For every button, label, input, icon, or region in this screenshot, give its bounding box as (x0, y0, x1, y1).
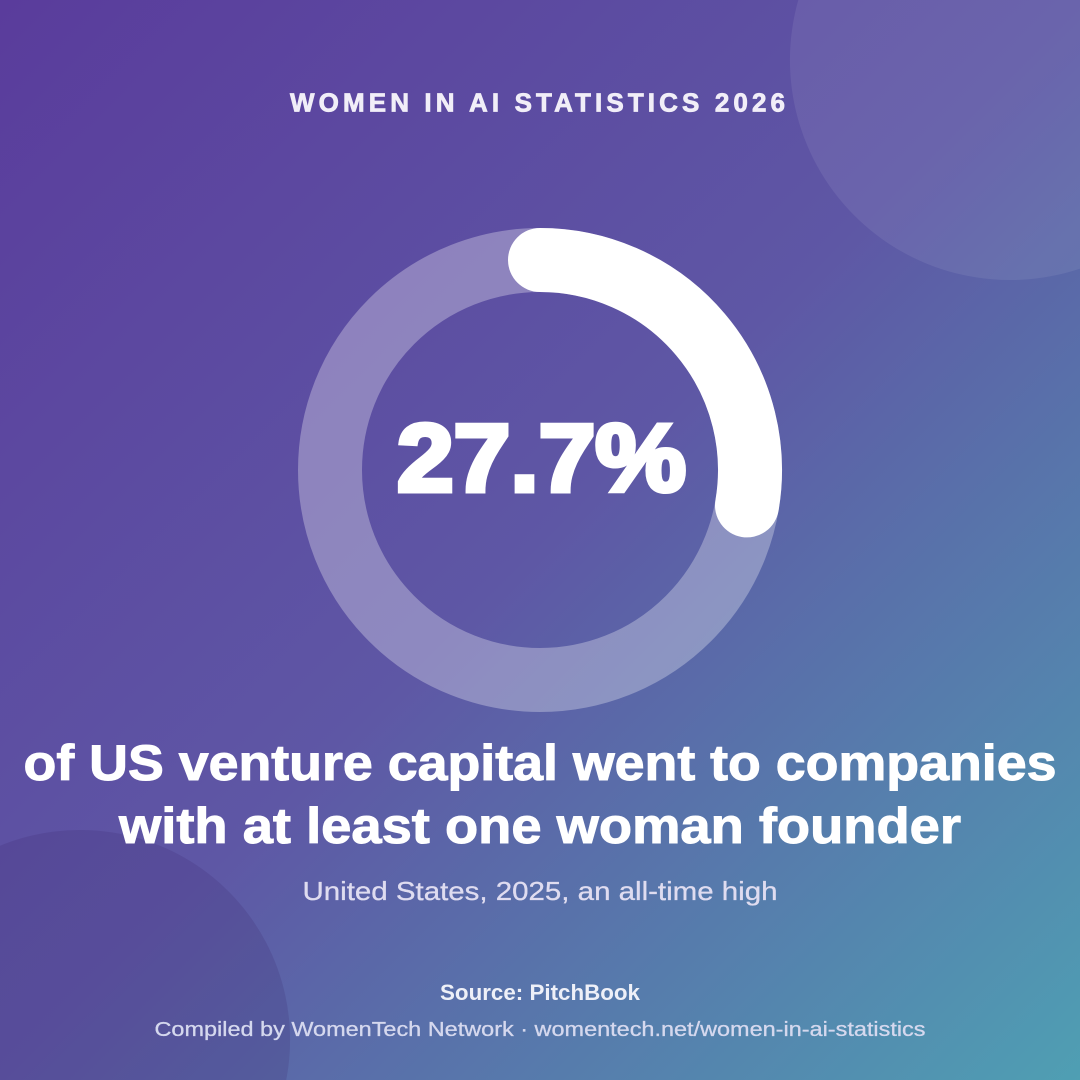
headline: with at least one woman founder (118, 798, 961, 854)
donut chart: 27.7% (330, 260, 750, 680)
donut track (330, 260, 750, 680)
subtitle: United States, 2025, an all-time high (302, 876, 778, 906)
donut value arc (540, 260, 750, 505)
headline (24, 735, 1056, 854)
big number: 27.7% (397, 405, 686, 512)
title: WOMEN IN AI STATISTICS 2026 (290, 88, 785, 118)
decorative circle: top right (790, 0, 1080, 280)
headline: of US venture capital went to companies (24, 735, 1056, 791)
credit: Compiled by WomenTech Network · womentech.net/women-in-ai-statistics (154, 1019, 925, 1041)
source: Source: PitchBook (440, 980, 641, 1005)
decorative circle: bottom left (0, 830, 290, 1080)
